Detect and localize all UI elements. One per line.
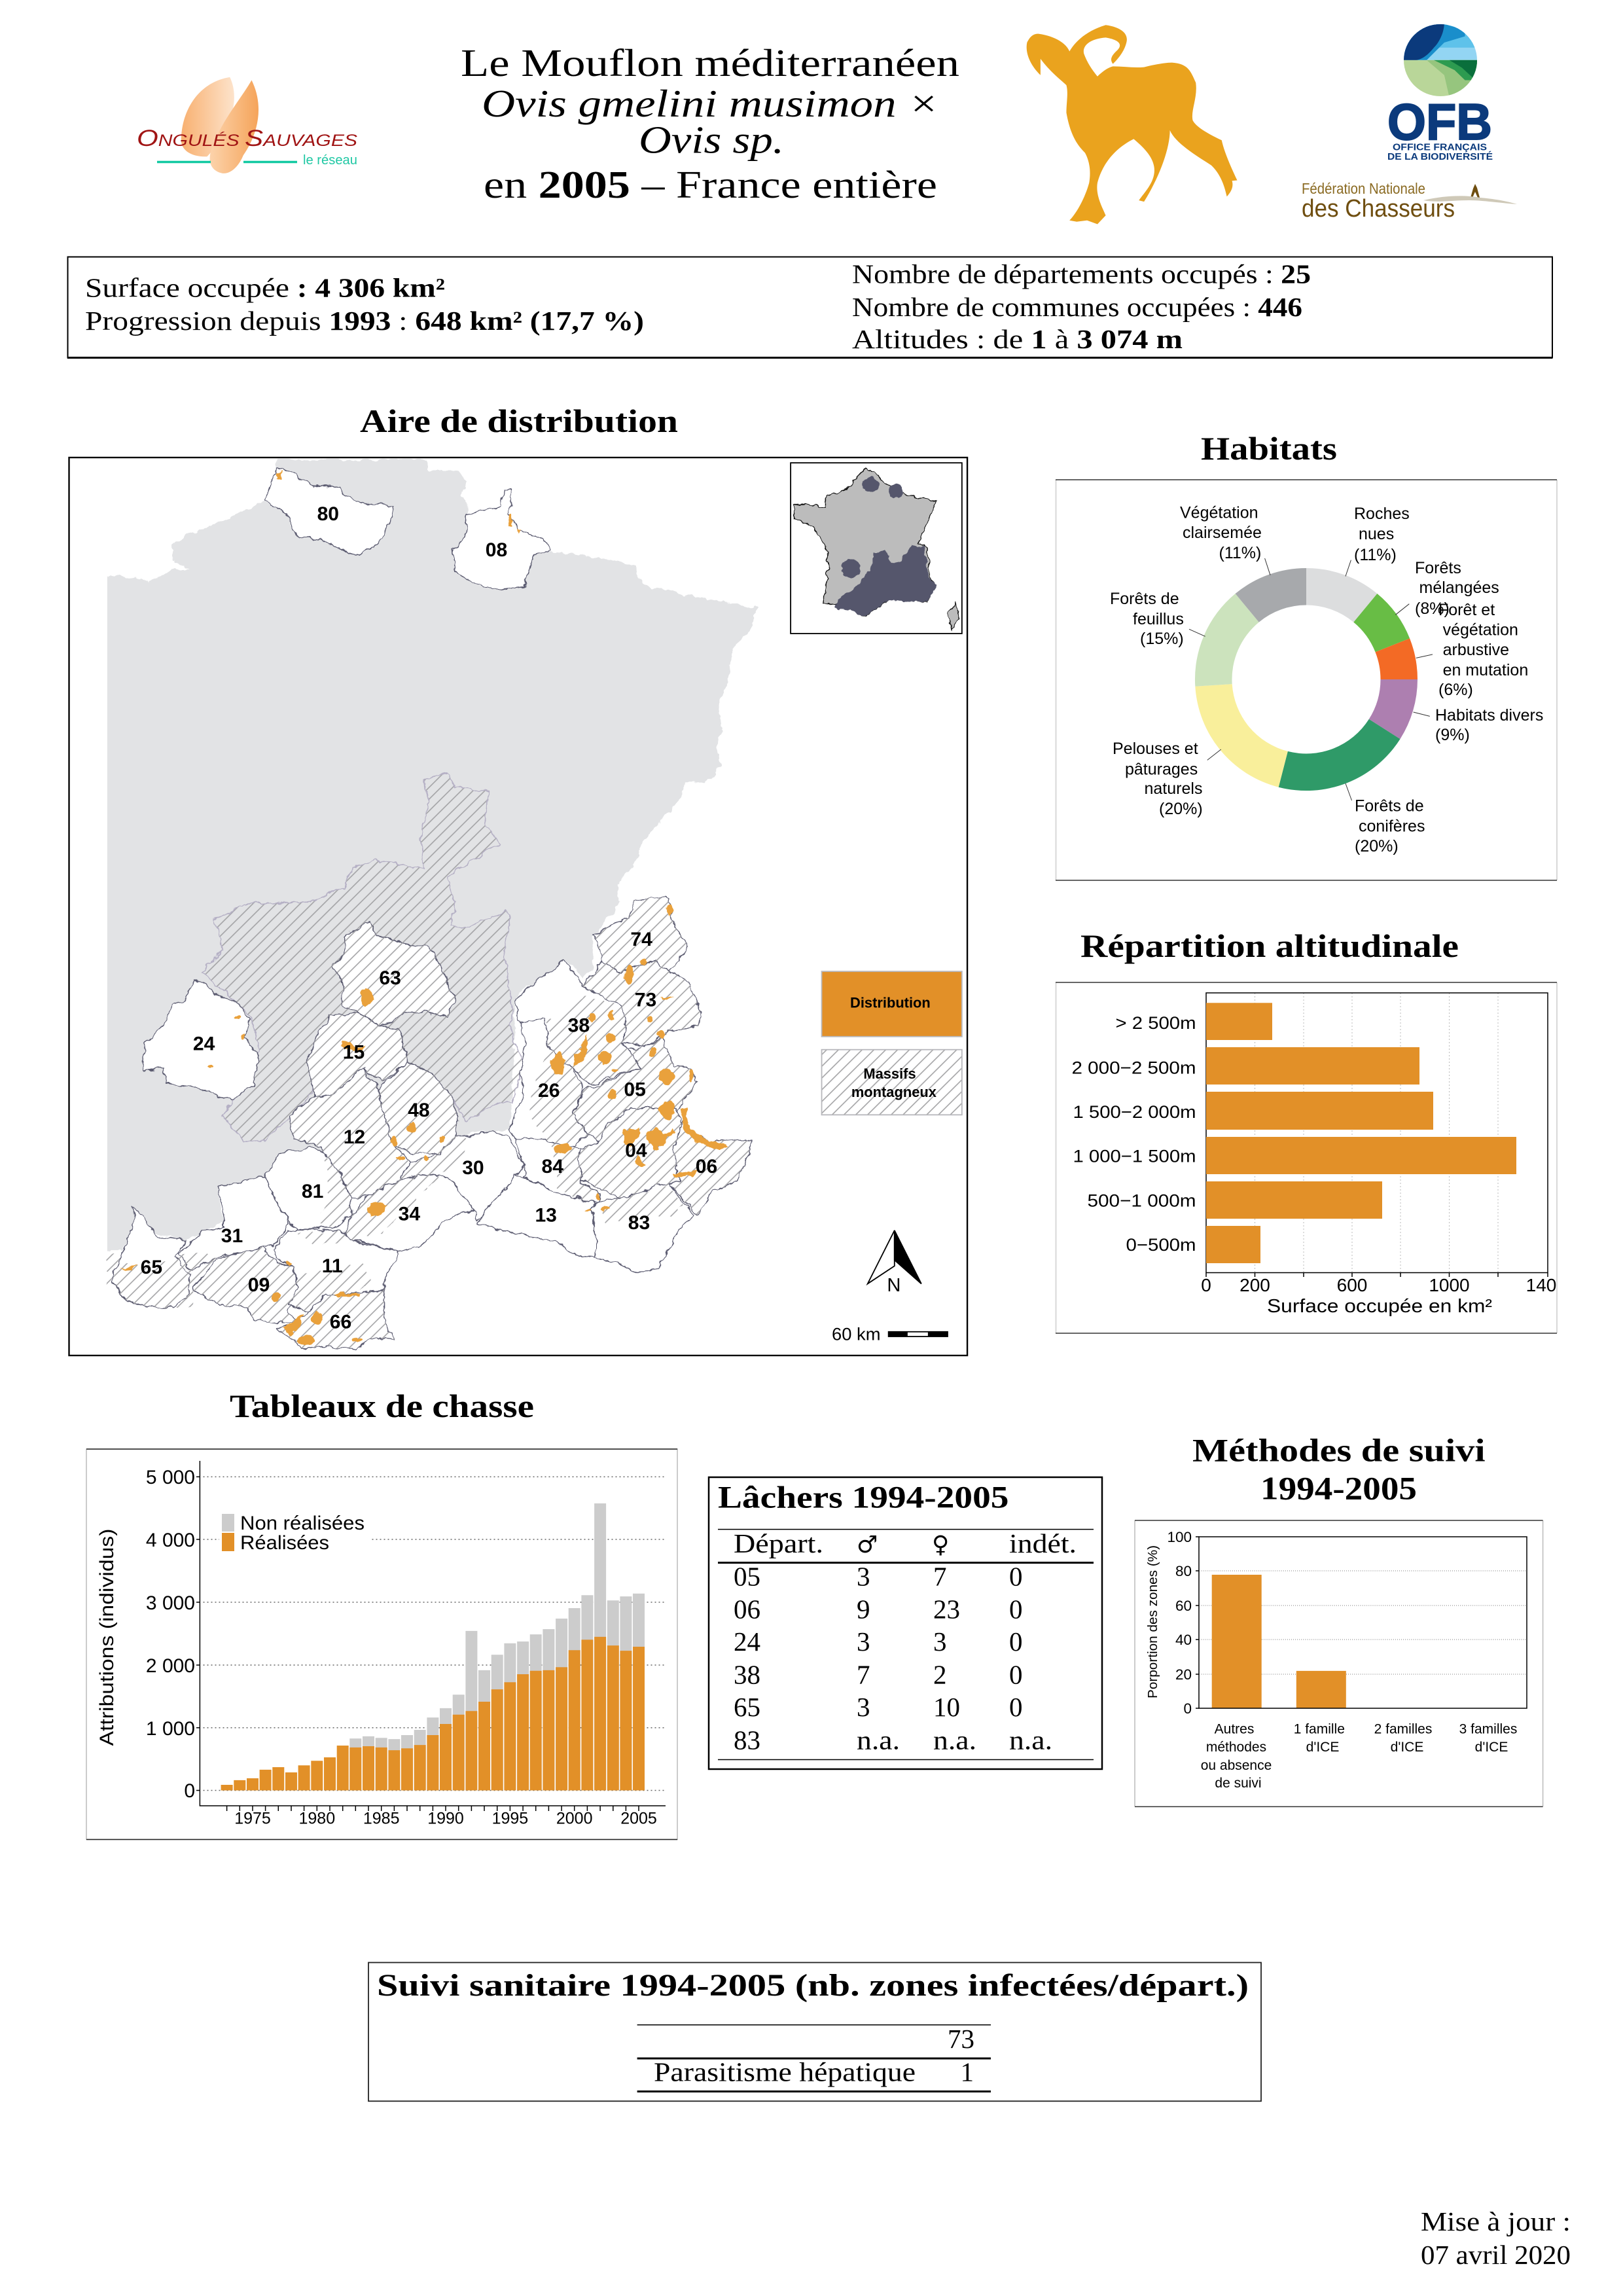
donut labels: conifères bbox=[1359, 817, 1425, 836]
donut labels: pâturages bbox=[1125, 761, 1198, 779]
x axis labels: d'ICE bbox=[1306, 1740, 1339, 1755]
table body: 83 bbox=[734, 1725, 760, 1755]
icon: north arrow: N bbox=[887, 1275, 901, 1296]
x axis year labels: 2000 bbox=[556, 1809, 593, 1827]
y axis labels: 5 000 bbox=[146, 1467, 195, 1488]
title: Ovis gmelini musimon × bbox=[482, 82, 939, 125]
table body: 0 bbox=[1009, 1692, 1022, 1722]
method bars bbox=[1212, 1575, 1346, 1708]
altitude class labels: 1 500−2 000m bbox=[1073, 1102, 1196, 1122]
legend: Réalisées bbox=[240, 1532, 329, 1554]
panel: distribution map bbox=[69, 457, 967, 1355]
update date: Mise à jour : bbox=[1421, 2206, 1571, 2236]
table rules bbox=[637, 2024, 991, 2026]
department labels: 48 bbox=[408, 1100, 430, 1121]
altitude class labels bbox=[1072, 1013, 1196, 1255]
department labels: 38 bbox=[568, 1015, 590, 1037]
heading: Répartition altitudinale: Répartition altitudinale bbox=[1080, 927, 1459, 964]
panel: Lâchers table bbox=[709, 1477, 1102, 1769]
title bbox=[461, 41, 959, 206]
altitude class labels: 2 000−2 500m bbox=[1072, 1058, 1196, 1078]
departments, communes, altitudes text: Altitudes : de 1 à 3 074 m bbox=[852, 324, 1183, 354]
table body: 3 bbox=[857, 1626, 870, 1657]
panel: altitude bar chart bbox=[1056, 982, 1557, 1333]
mountain hatch over departments bbox=[113, 897, 750, 1349]
donut labels: Forêt et bbox=[1438, 601, 1495, 619]
axis ticks bbox=[196, 1477, 639, 1811]
department labels: 26 bbox=[538, 1080, 560, 1102]
gridlines bbox=[1199, 1571, 1527, 1674]
axis ticks bbox=[1206, 1272, 1548, 1277]
table body: 23 bbox=[933, 1594, 960, 1624]
table body: ♂ bbox=[857, 1532, 878, 1558]
table body: 2 bbox=[933, 1660, 946, 1690]
legend: distribution: Distribution bbox=[850, 994, 931, 1011]
x axis labels: Autres bbox=[1215, 1721, 1254, 1737]
departments, communes, altitudes text bbox=[852, 259, 1311, 354]
department labels: 31 bbox=[221, 1225, 243, 1247]
map base: France in grey bbox=[95, 459, 757, 1251]
surface text bbox=[85, 272, 644, 336]
heading: Aire de distribution: Aire de distribution bbox=[360, 403, 678, 439]
table body: 0 bbox=[1009, 1660, 1022, 1690]
x axis labels: 1000 bbox=[1429, 1275, 1470, 1295]
department labels: 04 bbox=[625, 1140, 647, 1162]
table title: Lâchers 1994-2005 bbox=[718, 1480, 1009, 1515]
table body: 0 bbox=[1009, 1561, 1022, 1591]
table body: 38 bbox=[734, 1660, 760, 1690]
donut labels: (20%) bbox=[1159, 800, 1203, 818]
panel: monitoring methods chart bbox=[1135, 1520, 1543, 1806]
distribution patches bbox=[118, 472, 727, 1345]
legend: distribution bbox=[822, 971, 962, 1037]
donut labels: Forêts de bbox=[1355, 797, 1424, 816]
y axis labels: 80 bbox=[1175, 1563, 1192, 1579]
logo: Fédération Nationale des Chasseurs bbox=[1302, 180, 1517, 223]
donut labels: Végétation bbox=[1180, 504, 1258, 522]
y axis labels: 100 bbox=[1167, 1529, 1192, 1545]
departments, communes, altitudes text: Nombre de communes occupées : 446 bbox=[852, 292, 1302, 322]
scale bar bbox=[832, 1324, 948, 1344]
x axis year labels: 2005 bbox=[620, 1809, 657, 1827]
logo: OFB bbox=[1387, 22, 1493, 162]
donut labels: mélangées bbox=[1419, 579, 1499, 597]
department labels: 11 bbox=[322, 1255, 343, 1277]
inset map of France bbox=[791, 463, 962, 634]
massif central hatch bbox=[106, 772, 522, 1285]
department labels: 66 bbox=[330, 1311, 351, 1333]
logo wordmark OFB: OFB bbox=[1387, 93, 1492, 151]
gridlines bbox=[203, 1477, 665, 1791]
y axis labels: 3 000 bbox=[146, 1592, 195, 1614]
y axis labels: 60 bbox=[1175, 1598, 1192, 1614]
logo wordmark: ONGULÉS SAUVAGES bbox=[137, 126, 357, 151]
table body bbox=[654, 2024, 974, 2087]
table body: Parasitisme hépatique bbox=[654, 2057, 916, 2087]
department labels: 08 bbox=[486, 539, 507, 561]
table body: 3 bbox=[857, 1692, 870, 1722]
donut labels: Pelouses et bbox=[1113, 740, 1198, 758]
department labels: 83 bbox=[628, 1212, 650, 1234]
department labels: 84 bbox=[541, 1156, 563, 1177]
heading: Méthodes de suivi: 1994-2005 bbox=[1260, 1470, 1417, 1507]
title: Ovis sp. bbox=[639, 118, 784, 161]
x axis year labels: 1990 bbox=[427, 1809, 464, 1827]
table body: n.a. bbox=[1009, 1725, 1052, 1755]
y axis labels bbox=[146, 1467, 195, 1802]
donut labels: Habitats divers bbox=[1435, 706, 1543, 725]
x axis labels: 2 familles bbox=[1374, 1721, 1432, 1737]
table rules bbox=[718, 1529, 1094, 1530]
department labels bbox=[141, 503, 717, 1333]
x axis labels: ou absence bbox=[1201, 1758, 1272, 1773]
icon: hoof lobes bbox=[181, 77, 259, 173]
donut labels: Forêts bbox=[1415, 559, 1461, 577]
department labels: 12 bbox=[344, 1126, 365, 1148]
donut labels: (8%) bbox=[1415, 600, 1450, 618]
table body: 0 bbox=[1009, 1594, 1022, 1624]
table body: ♀ bbox=[932, 1532, 949, 1558]
department labels: 13 bbox=[535, 1204, 557, 1226]
panel: Suivi sanitaire table bbox=[368, 1962, 1261, 2101]
donut labels: (6%) bbox=[1438, 681, 1473, 699]
logo: OFB: DE LA BIODIVERSITÉ bbox=[1387, 151, 1493, 162]
y axis labels bbox=[1167, 1529, 1192, 1717]
x axis labels: 600 bbox=[1337, 1275, 1367, 1295]
table body: 0 bbox=[1009, 1626, 1022, 1657]
department labels: 15 bbox=[343, 1041, 365, 1063]
panel: habitats donut chart bbox=[1056, 480, 1557, 880]
donut segments bbox=[1195, 568, 1418, 791]
leader lines bbox=[1189, 558, 1433, 800]
attributions not realised bbox=[349, 1503, 645, 1791]
department labels: 80 bbox=[317, 503, 339, 525]
update date bbox=[1421, 2206, 1571, 2270]
title: en 2005 – France entière bbox=[484, 163, 937, 206]
legend: massifs montagneux bbox=[822, 1050, 962, 1115]
attributions realised bbox=[221, 1637, 645, 1791]
logo: Ongulés sauvages le réseau bbox=[137, 77, 357, 173]
department labels: 65 bbox=[141, 1257, 162, 1278]
donut labels: arbustive bbox=[1443, 641, 1509, 659]
table body: 05 bbox=[734, 1561, 760, 1591]
heading: Méthodes de suivi bbox=[1192, 1432, 1486, 1507]
table body: 10 bbox=[933, 1692, 960, 1722]
x axis year labels: 1980 bbox=[298, 1809, 335, 1827]
legend: Non réalisées bbox=[240, 1513, 365, 1534]
table body: 3 bbox=[857, 1561, 870, 1591]
surface text: Progression depuis 1993 : 648 km² (17,7 %) bbox=[85, 306, 644, 336]
x axis year labels bbox=[234, 1809, 657, 1827]
table body: 7 bbox=[857, 1660, 870, 1690]
x axis labels: d'ICE bbox=[1475, 1740, 1508, 1755]
department labels: 05 bbox=[624, 1079, 646, 1100]
y axis labels: 1 000 bbox=[146, 1718, 195, 1740]
x axis year labels: 1975 bbox=[234, 1809, 271, 1827]
table body: 7 bbox=[933, 1561, 946, 1591]
department labels: 30 bbox=[462, 1157, 484, 1179]
department labels: 74 bbox=[630, 929, 652, 950]
table body: indét. bbox=[1009, 1528, 1077, 1558]
y axis title: Porportion des zones (%) bbox=[1146, 1545, 1160, 1698]
table body: n.a. bbox=[857, 1725, 900, 1755]
y axis labels: 40 bbox=[1175, 1632, 1192, 1648]
department labels: 06 bbox=[696, 1156, 717, 1177]
icon: OFB roundel bbox=[1404, 24, 1477, 96]
department labels: 63 bbox=[379, 967, 401, 989]
department labels: 24 bbox=[193, 1033, 215, 1055]
donut labels: végétation bbox=[1443, 620, 1518, 639]
y axis title: Attributions (individus) bbox=[96, 1529, 118, 1746]
table body: Départ. bbox=[734, 1528, 823, 1558]
y axis labels: 2 000 bbox=[146, 1655, 195, 1677]
logo green rule bbox=[157, 161, 297, 163]
altitude bars bbox=[1206, 1003, 1516, 1263]
table body: 65 bbox=[734, 1692, 760, 1722]
surface text: Surface occupée : 4 306 km² bbox=[85, 272, 445, 302]
table body: 3 bbox=[933, 1626, 946, 1657]
legend: massifs montagneux: Massifs bbox=[863, 1066, 916, 1082]
donut labels: feuillus bbox=[1133, 610, 1184, 628]
department labels: 73 bbox=[635, 990, 656, 1011]
donut labels bbox=[1110, 504, 1543, 855]
x axis labels: 140 bbox=[1526, 1275, 1556, 1295]
departments, communes, altitudes text: Nombre de départements occupés : 25 bbox=[852, 259, 1311, 289]
donut labels: (11%) bbox=[1219, 544, 1261, 562]
gridlines bbox=[1255, 993, 1498, 1273]
x axis year labels: 1995 bbox=[492, 1809, 528, 1827]
x axis labels bbox=[1201, 1721, 1517, 1791]
update date: 07 avril 2020 bbox=[1421, 2240, 1571, 2270]
department labels: 34 bbox=[399, 1204, 420, 1225]
icon: hunter and swoosh bbox=[1423, 184, 1517, 204]
panel: key figures bbox=[67, 257, 1552, 357]
logo: Fédération Nationale des Chasseurs: des Chasseurs bbox=[1302, 195, 1455, 223]
table body: 24 bbox=[734, 1626, 760, 1657]
scale bar: 60 km bbox=[832, 1324, 881, 1344]
donut labels: Forêts de bbox=[1110, 590, 1179, 608]
donut labels: (20%) bbox=[1355, 837, 1399, 855]
table body: 1 bbox=[961, 2057, 974, 2087]
altitude class labels: > 2 500m bbox=[1115, 1013, 1196, 1033]
heading: Tableaux de chasse: Tableaux de chasse bbox=[230, 1388, 534, 1424]
x axis title: Surface occupée en km² bbox=[1267, 1296, 1492, 1317]
donut labels: clairsemée bbox=[1183, 524, 1262, 542]
legend: massifs montagneux: montagneux bbox=[851, 1084, 936, 1100]
title: Le Mouflon méditerranéen bbox=[461, 41, 959, 84]
donut labels: naturels bbox=[1144, 780, 1202, 798]
logo tagline: le réseau bbox=[303, 153, 357, 168]
axes bbox=[200, 1461, 666, 1806]
donut labels: en mutation bbox=[1443, 661, 1528, 679]
department labels: 09 bbox=[248, 1274, 270, 1296]
y axis labels: 4 000 bbox=[146, 1530, 195, 1551]
department labels: 81 bbox=[302, 1181, 323, 1202]
x axis labels: d'ICE bbox=[1391, 1740, 1423, 1755]
table body: 06 bbox=[734, 1594, 760, 1624]
donut labels: (15%) bbox=[1140, 630, 1184, 648]
donut labels: Roches bbox=[1354, 505, 1410, 523]
x axis labels: 3 familles bbox=[1459, 1721, 1517, 1737]
y axis labels: 0 bbox=[184, 1780, 195, 1802]
x axis labels: 200 bbox=[1240, 1275, 1270, 1295]
icon: mouflon silhouette bbox=[1027, 25, 1237, 224]
donut labels: (9%) bbox=[1435, 726, 1470, 744]
panel: hunting bag chart bbox=[86, 1449, 677, 1839]
heading: Habitats: Habitats bbox=[1201, 430, 1337, 467]
legend bbox=[219, 1512, 372, 1554]
table body bbox=[734, 1528, 1077, 1755]
table body: 73 bbox=[948, 2024, 974, 2054]
table body: n.a. bbox=[933, 1725, 976, 1755]
table title: Suivi sanitaire 1994-2005 (nb. zones infectées/départ.) bbox=[377, 1968, 1249, 2003]
altitude class labels: 1 000−1 500m bbox=[1073, 1147, 1196, 1166]
donut labels: (11%) bbox=[1354, 546, 1397, 564]
altitude class labels: 500−1 000m bbox=[1088, 1191, 1196, 1211]
x axis labels: méthodes bbox=[1206, 1740, 1266, 1755]
x axis year labels: 1985 bbox=[363, 1809, 400, 1827]
departments bbox=[111, 469, 751, 1349]
y axis labels: 20 bbox=[1175, 1666, 1192, 1683]
y axis labels: 0 bbox=[1183, 1700, 1192, 1717]
x axis labels bbox=[1201, 1275, 1556, 1295]
table body: 9 bbox=[857, 1594, 870, 1624]
x axis labels: de suivi bbox=[1215, 1776, 1262, 1791]
x axis labels: 1 famille bbox=[1294, 1721, 1345, 1737]
plot frame bbox=[1199, 1537, 1527, 1708]
altitude class labels: 0−500m bbox=[1126, 1235, 1196, 1255]
heading: Méthodes de suivi: Méthodes de suivi bbox=[1192, 1432, 1486, 1469]
donut labels: nues bbox=[1359, 525, 1394, 543]
icon: north arrow bbox=[868, 1230, 921, 1296]
logo: Fédération Nationale des Chasseurs: Fédération Nationale bbox=[1302, 180, 1425, 197]
x axis labels: 0 bbox=[1201, 1275, 1211, 1295]
logo caption: OFFICE FRANÇAIS bbox=[1393, 143, 1487, 153]
